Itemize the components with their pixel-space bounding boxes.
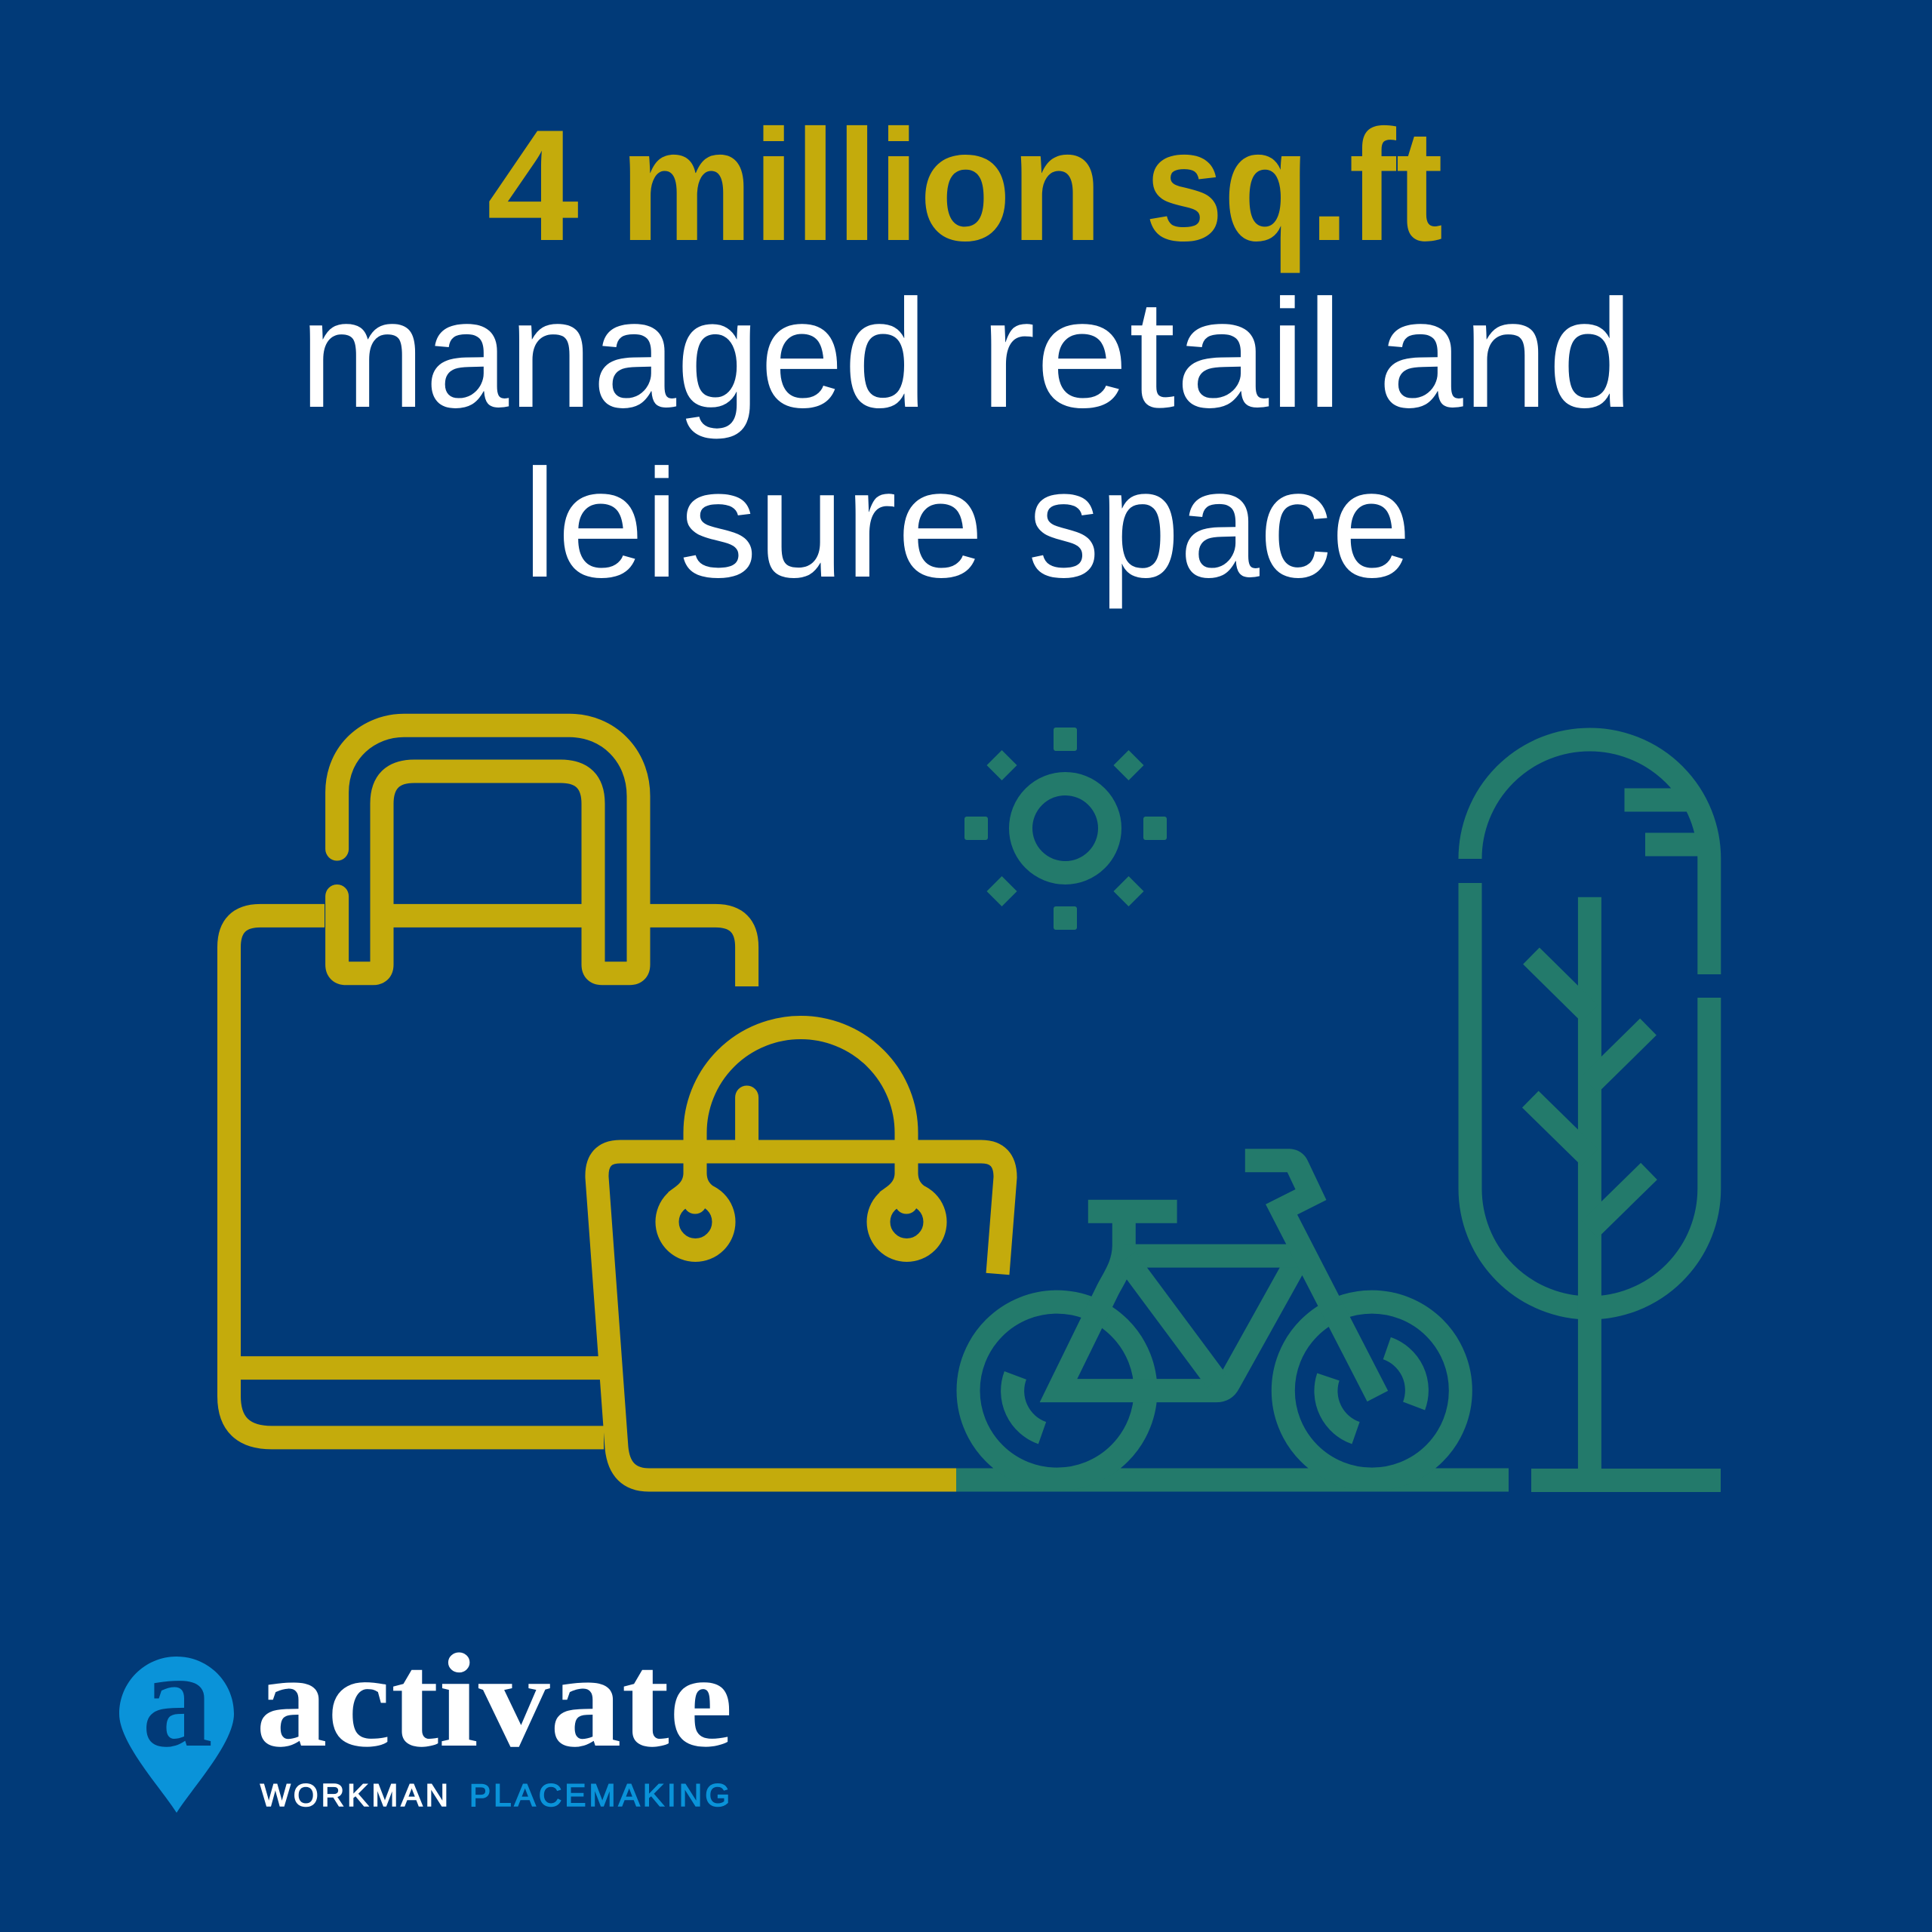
logo strapline <box>260 1777 730 1813</box>
headline line 2: and <box>1378 268 1633 440</box>
headline figure <box>487 97 1443 274</box>
headline figure: 4 <box>487 97 579 274</box>
headline line 3: leisure <box>522 438 984 610</box>
logo strapline: WORKMAN <box>260 1777 448 1813</box>
headline line 2 <box>300 268 1633 440</box>
headline figure: million <box>620 97 1103 274</box>
icon: large shopping bag <box>229 725 747 1438</box>
icon: location pin: a <box>142 1623 213 1776</box>
icon: small shopping bag <box>597 1028 1005 1480</box>
headline figure: sq.ft <box>1145 97 1443 274</box>
logo: activate workman placemaking <box>119 1623 733 1813</box>
logo wordmark: activate <box>256 1626 733 1775</box>
icon: location pin <box>119 1623 234 1813</box>
headline line 2: managed <box>300 268 928 440</box>
icon: sun <box>964 728 1167 930</box>
title <box>300 97 1633 610</box>
headline line 3: space <box>1028 438 1411 610</box>
headline line 2: retail <box>980 268 1343 440</box>
icon: bicycle <box>956 1161 1509 1480</box>
headline line 3 <box>522 438 1411 610</box>
logo strapline: PLACEMAKING <box>469 1777 730 1813</box>
icon: tree <box>1470 740 1721 1481</box>
